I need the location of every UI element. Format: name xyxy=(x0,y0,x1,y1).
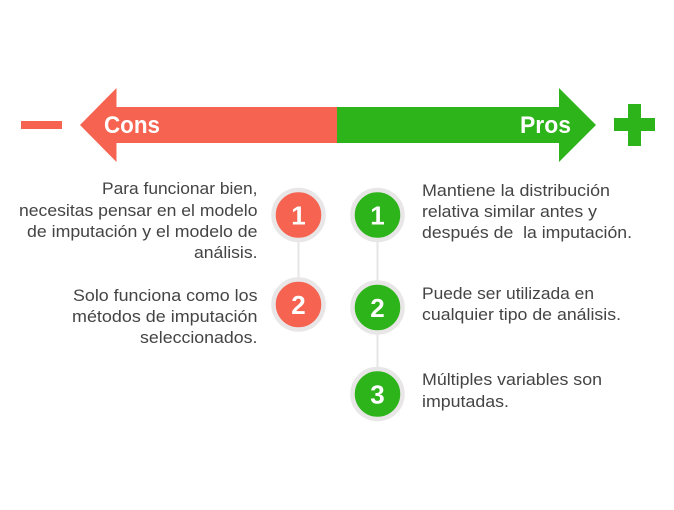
badge: pros 1 xyxy=(352,190,402,240)
text: cons 2: métodos de imputación xyxy=(72,307,258,326)
badge: pros 2: 2 xyxy=(370,293,385,323)
label: cons: Cons xyxy=(104,112,160,139)
text: pros 1 xyxy=(422,181,632,242)
text: cons 2: Solo funciona como los xyxy=(73,286,258,305)
text: cons 2 xyxy=(72,286,258,347)
label: pros: Pros xyxy=(520,112,571,139)
text: cons 1: Para funcionar bien, xyxy=(102,179,258,198)
text: cons 2: seleccionados. xyxy=(140,328,258,347)
badge: pros 3 xyxy=(352,369,402,419)
badge: cons 1 xyxy=(274,190,324,240)
text: pros 1: después de la imputación. xyxy=(422,223,632,242)
badge: pros 2 xyxy=(352,282,402,332)
connector: pros timeline xyxy=(376,240,378,370)
text: cons 1: de imputación y el modelo de xyxy=(27,222,258,241)
text: pros 3: imputadas. xyxy=(422,392,509,411)
icon: minus sign xyxy=(21,121,62,129)
badge: cons 1: 1 xyxy=(291,200,306,230)
text: pros 3: Múltiples variables son xyxy=(422,370,602,389)
text: pros 1: relativa similar antes y xyxy=(422,202,598,221)
text: pros 1: Mantiene la distribución xyxy=(422,181,610,200)
text: cons 1: análisis. xyxy=(194,243,258,262)
text: pros 2: cualquier tipo de análisis. xyxy=(422,305,621,324)
badge: pros 3: 3 xyxy=(370,380,385,410)
text: pros 2 xyxy=(422,284,621,324)
text: cons 1 xyxy=(19,179,258,262)
text: cons 1: necesitas pensar en el modelo xyxy=(19,201,258,220)
arrow: cons xyxy=(80,88,337,162)
arrow: pros xyxy=(337,88,596,162)
text: pros 2: Puede ser utilizada en xyxy=(422,284,594,303)
connector: cons timeline xyxy=(298,240,300,280)
badge: cons 2 xyxy=(274,280,324,330)
badge: pros 1: 1 xyxy=(370,200,385,230)
icon: plus sign xyxy=(614,104,655,146)
badge: cons 2: 2 xyxy=(291,290,306,320)
text: pros 3 xyxy=(422,370,602,411)
